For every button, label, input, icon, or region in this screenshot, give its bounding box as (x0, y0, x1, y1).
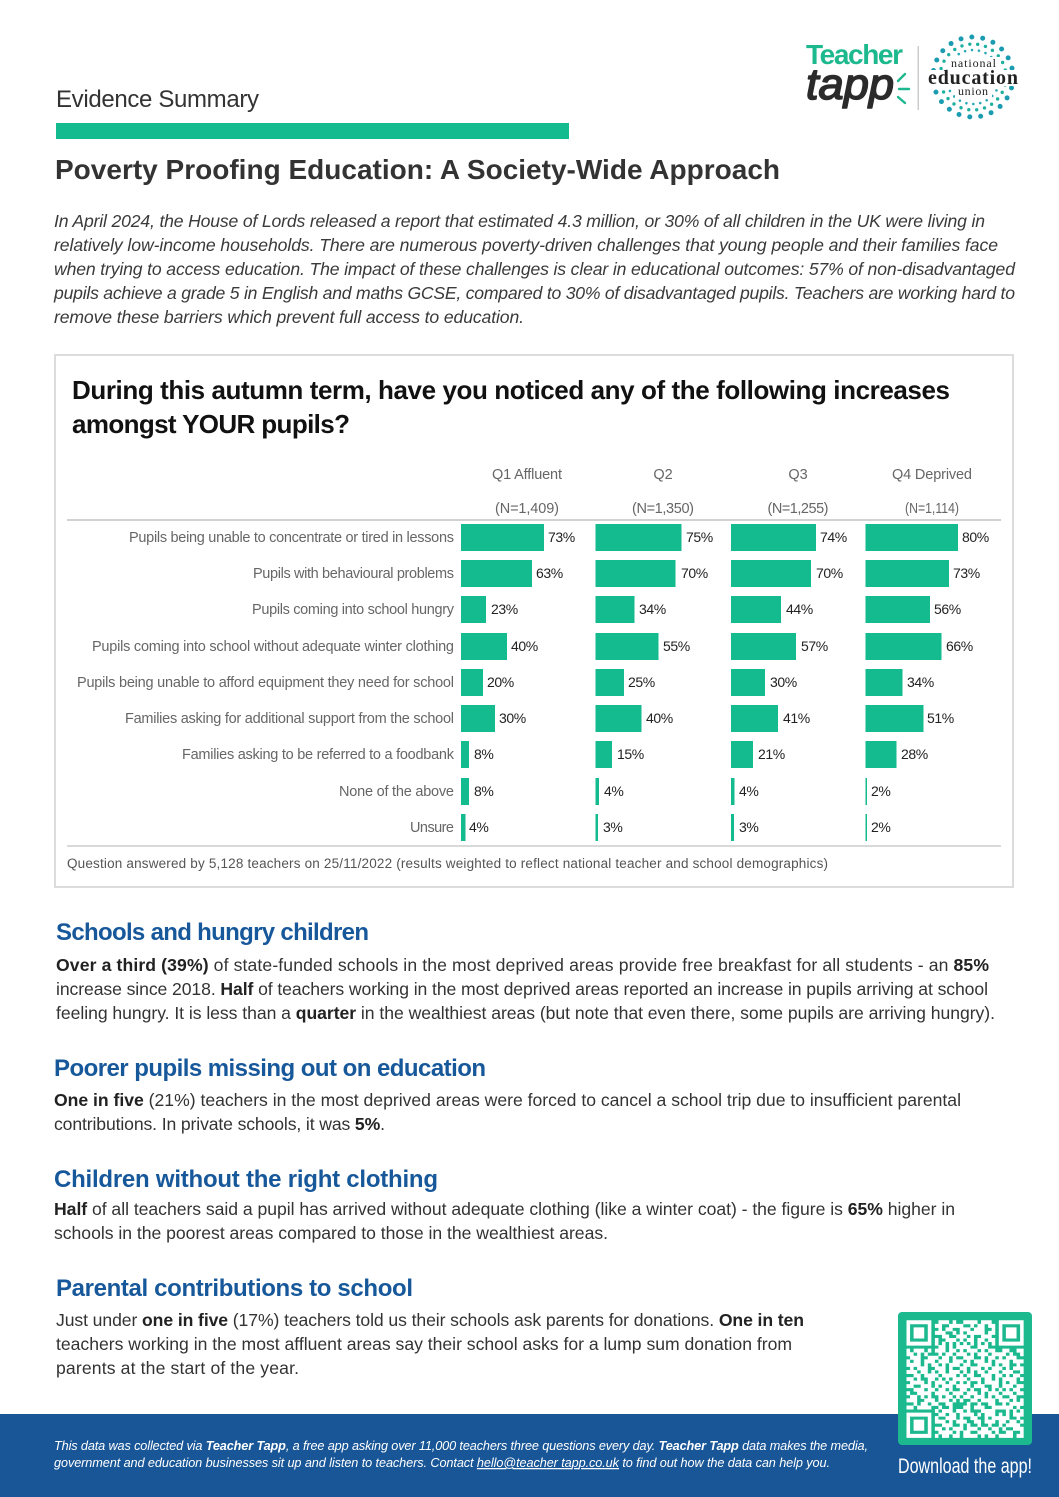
chart footnote: Question answered by 5,128 teachers on 25/11/2022 (results weighted to reflect national teacher and school demographics) (67, 856, 828, 871)
intro text: relatively low-income households. There are numerous poverty-driven challenges that young people and their families face (54, 235, 998, 255)
bars: Q4 Deprived: 51% (927, 710, 954, 726)
column headers: (N=1,255) (768, 501, 828, 517)
logo: National Education Union (926, 37, 1020, 117)
section: Children without the right clothing: schools in the poorest areas compared to those in the wealthiest areas. (54, 1223, 608, 1243)
intro text: In April 2024, the House of Lords released a report that estimated 4.3 million, or 30% of all children in the UK were living in (54, 211, 985, 231)
column headers (492, 467, 972, 517)
section: Children without the right clothing (54, 1166, 955, 1243)
logo: Teacher Tapp (806, 39, 909, 109)
bars: Q1 Affluent: 30% (499, 710, 526, 726)
bars: Q1 Affluent: 40% (511, 638, 538, 654)
bars: Q4 Deprived: 56% (934, 601, 961, 617)
bars: Q3: 21% (758, 746, 785, 762)
footer text: This data was collected via Teacher Tapp, a free app asking over 11,000 teachers three questions every day. Teacher Tapp data makes the media, (54, 1439, 868, 1453)
row labels: Pupils with behavioural problems (253, 566, 454, 582)
column headers: Q1 Affluent (492, 467, 562, 483)
chart heading: During this autumn term, have you noticed any of the following increases (72, 375, 950, 405)
column headers: (N=1,114) (905, 501, 959, 517)
column headers: Q3 (788, 467, 808, 483)
section: Parental contributions to school: Parental contributions to school (56, 1275, 413, 1302)
row labels: Families asking for additional support from the school (125, 711, 454, 727)
column headers: (N=1,350) (632, 501, 694, 517)
bars: Q1 Affluent: 63% (536, 565, 563, 581)
column headers: Q2 (653, 467, 673, 483)
section: Children without the right clothing: Half of all teachers said a pupil has arrived without adequate clothing (like a winter coat) - the figure is 65% higher in (54, 1199, 955, 1219)
bars: Q4 Deprived: 2% (871, 783, 890, 799)
row labels: Families asking to be referred to a foodbank (182, 747, 455, 763)
row labels (77, 530, 455, 836)
bars: Q1 Affluent: 8% (474, 746, 493, 762)
bars: Q2 (596, 524, 713, 841)
bars: Q3: 74% (820, 529, 847, 545)
intro text: pupils achieve a grade 5 in English and maths GCSE, compared to 30% of disadvantaged pupils. Teachers are working hard to (53, 283, 1015, 303)
section: Children without the right clothing: Children without the right clothing (54, 1166, 438, 1193)
section: Schools and hungry children: increase since 2018. Half of teachers working in the most deprived areas reported an increase in pupils arriving at school (56, 979, 988, 999)
bars: Q4 Deprived: 34% (907, 674, 934, 690)
bars: Q3: 3% (739, 819, 758, 835)
footer text: government and education businesses sit up and listen to teachers. Contact hello@teacher tapp.co.uk to find out how the data can help you. (54, 1456, 830, 1470)
section: Parental contributions to school: Just under one in five (17%) teachers told us their schools ask parents for donations. One in ten (56, 1310, 804, 1330)
footer band (0, 1414, 1059, 1497)
section: Poorer pupils missing out on education: One in five (21%) teachers in the most deprived areas were forced to cancel a school trip due to insufficient parental (54, 1090, 961, 1110)
bars: Q3: 4% (739, 783, 758, 799)
bars: Q3: 30% (770, 674, 797, 690)
section: Poorer pupils missing out on education (54, 1055, 961, 1134)
bars: Q2: 4% (604, 783, 623, 799)
bars: Q4 Deprived: 73% (953, 565, 980, 581)
chart heading (72, 375, 950, 439)
section: Poorer pupils missing out on education: Poorer pupils missing out on education (54, 1055, 486, 1082)
bars: Q1 Affluent: 73% (548, 529, 575, 545)
column headers: Q4 Deprived (892, 467, 972, 483)
bars: Q2: 34% (639, 601, 666, 617)
QR code (898, 1312, 1032, 1445)
bars: Q1 Affluent: 20% (487, 674, 514, 690)
logo: National Education Union: education (928, 67, 1018, 89)
row labels: Unsure (410, 820, 454, 836)
logo: Teacher Tapp: Teacher (806, 39, 903, 70)
label: Evidence Summary: Evidence Summary (56, 86, 259, 113)
row labels: None of the above (339, 784, 454, 800)
logo divider (918, 46, 919, 110)
bars: Q3: 41% (783, 710, 810, 726)
bars: Q1 Affluent: 23% (491, 601, 518, 617)
bars: Q1 Affluent (461, 524, 575, 841)
bars: Q2: 40% (646, 710, 673, 726)
bars: Q2: 25% (628, 674, 655, 690)
bars: Q3: 70% (816, 565, 843, 581)
logo: National Education Union: union (958, 84, 988, 98)
bars: Q4 Deprived: 80% (962, 529, 989, 545)
header rule (56, 123, 569, 139)
section: Parental contributions to school (56, 1275, 804, 1378)
row labels: Pupils coming into school hungry (252, 602, 455, 618)
bars: Q2: 3% (603, 819, 622, 835)
chart heading: amongst YOUR pupils? (72, 409, 350, 439)
bars: Q2: 55% (663, 638, 690, 654)
logo: Teacher Tapp: tapp (806, 60, 894, 109)
section: Parental contributions to school: teachers working in the most affluent areas say their school asks for a lump sum donation from (56, 1334, 792, 1354)
row labels: Pupils being unable to afford equipment they need for school (77, 675, 454, 691)
column headers: (N=1,409) (495, 501, 559, 517)
bars: Q4 Deprived: 66% (946, 638, 973, 654)
row labels: Pupils being unable to concentrate or tired in lessons (129, 530, 454, 546)
logo: National Education Union: national (951, 56, 997, 70)
bars: Q3: 44% (786, 601, 813, 617)
bars: Q1 Affluent: 4% (469, 819, 488, 835)
footer text (54, 1439, 868, 1470)
bars: Q4 Deprived: 28% (901, 746, 928, 762)
bars: Q2: 70% (681, 565, 708, 581)
intro text: remove these barriers which prevent full access to education. (54, 307, 524, 327)
title: Poverty Proofing Education: A Society-Wide Approach (55, 154, 780, 185)
section: Schools and hungry children: Schools and hungry children (56, 919, 369, 946)
intro text: when trying to access education. The impact of these challenges is clear in educational outcomes: 57% of non-disadvantaged (54, 259, 1016, 279)
section: Schools and hungry children (56, 919, 995, 1023)
section: Poorer pupils missing out on education: contributions. In private schools, it was 5%. (54, 1114, 385, 1134)
bars: Q2: 15% (617, 746, 644, 762)
section: Parental contributions to school: parents at the start of the year. (56, 1358, 299, 1378)
bars: Q1 Affluent: 8% (474, 783, 493, 799)
panel: survey chart (55, 355, 1013, 887)
bars: Q4 Deprived: 2% (871, 819, 890, 835)
section: Schools and hungry children: Over a third (39%) of state-funded schools in the most deprived areas provide free breakfast for all students - an 85% (56, 955, 989, 975)
bars: Q3 (731, 524, 847, 841)
bars: Q3: 57% (801, 638, 828, 654)
bars: Q2: 75% (686, 529, 713, 545)
section: Schools and hungry children: feeling hungry. It is less than a quarter in the wealthiest areas (but note that even there, some pupils are arriving hungry). (56, 1003, 995, 1023)
intro text (53, 211, 1016, 327)
row labels: Pupils coming into school without adequate winter clothing (92, 639, 454, 655)
bars: Q4 Deprived (866, 524, 989, 841)
